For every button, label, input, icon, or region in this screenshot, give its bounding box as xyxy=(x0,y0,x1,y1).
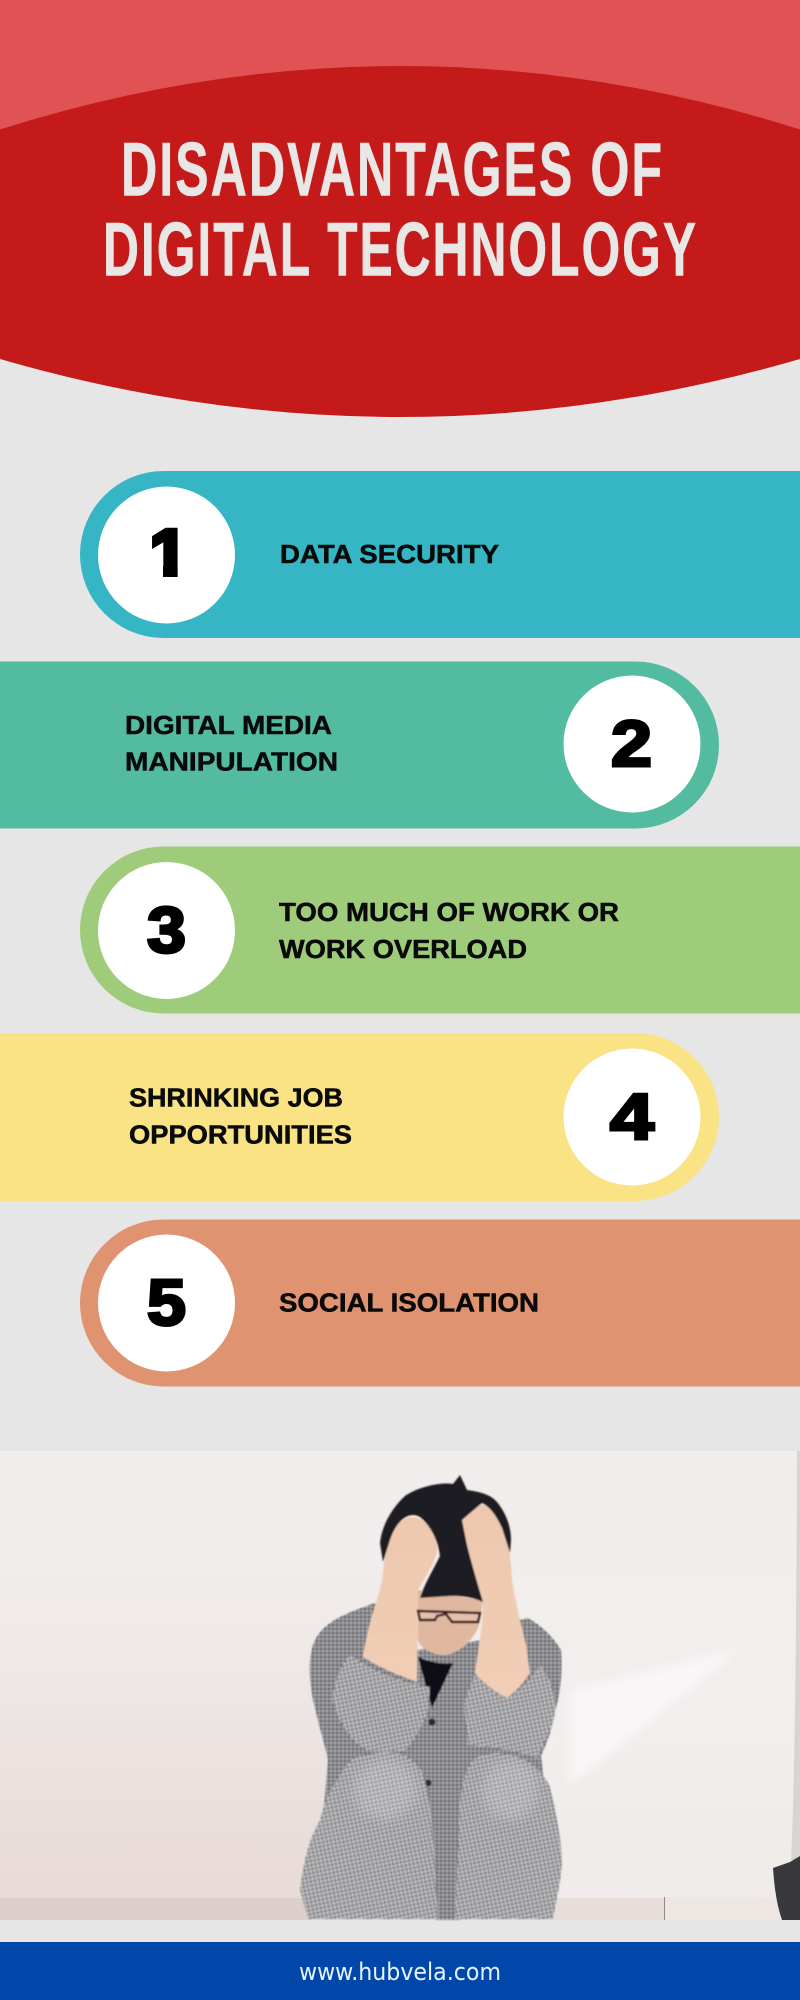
face xyxy=(418,1590,482,1655)
number badge 3: 3 xyxy=(147,894,186,966)
left sleeve xyxy=(332,1655,430,1752)
panel: item 3 work overload xyxy=(80,846,800,1014)
shirt buttons xyxy=(424,1718,436,1786)
wall xyxy=(0,1451,800,1920)
title xyxy=(103,128,698,292)
label: shrinking job opportunities: SHRINKING JOB xyxy=(129,1084,343,1112)
right arm and hand xyxy=(462,1505,530,1698)
knee highlights xyxy=(353,1760,538,1820)
label: digital media manipulation: MANIPULATION xyxy=(125,748,338,776)
label: data security: DATA SECURITY xyxy=(280,541,499,569)
footer bar xyxy=(0,1942,800,2000)
skirting board xyxy=(0,1897,800,1920)
number badge 1: 1 xyxy=(150,516,188,589)
left arm and hand xyxy=(363,1517,437,1682)
header top band xyxy=(0,0,800,140)
panel: item 5 social isolation xyxy=(80,1220,800,1386)
glasses xyxy=(418,1611,480,1622)
label: digital media manipulation: DIGITAL MEDIA xyxy=(125,712,332,740)
black undershirt xyxy=(418,1657,453,1708)
number badge 1 xyxy=(98,486,235,624)
footer website: www.hubvela.com xyxy=(299,1958,501,1986)
wall light patch xyxy=(570,1648,742,1785)
jacket torso xyxy=(310,1603,562,1920)
label: too much of work or work overload: TOO MUCH OF WORK OR xyxy=(279,899,619,927)
hair xyxy=(380,1475,511,1602)
right sleeve xyxy=(464,1665,555,1758)
photo: stressed man sitting against a wall xyxy=(0,1451,800,1920)
wall edge xyxy=(791,1451,800,1860)
label: too much of work or work overload: WORK OVERLOAD xyxy=(279,936,527,964)
number badge 2 xyxy=(564,676,700,812)
number badge 5 xyxy=(98,1234,235,1372)
label: shrinking job opportunities: OPPORTUNITIES xyxy=(129,1122,352,1150)
header band xyxy=(0,0,800,417)
label: shrinking job opportunities xyxy=(129,1084,352,1150)
man xyxy=(300,1475,562,1920)
wall pink shade xyxy=(0,1560,430,1900)
panel: item 1 data security xyxy=(80,471,800,638)
panel: item 4 shrinking job opportunities xyxy=(0,1033,719,1201)
right trouser leg xyxy=(455,1753,562,1919)
label: too much of work or work overload xyxy=(279,899,619,964)
number badge 4 xyxy=(564,1048,700,1186)
number badge 4: 4 xyxy=(610,1080,654,1153)
number badge 3 xyxy=(98,862,235,999)
label: digital media manipulation xyxy=(125,712,338,776)
header red shape xyxy=(0,66,800,417)
dark bag xyxy=(773,1856,800,1920)
number badge 2: 2 xyxy=(611,707,652,780)
number badge 5: 5 xyxy=(147,1266,186,1339)
left trouser leg xyxy=(300,1752,438,1919)
label: social isolation: SOCIAL ISOLATION xyxy=(279,1290,539,1318)
panel: item 2 digital media manipulation xyxy=(0,662,719,828)
